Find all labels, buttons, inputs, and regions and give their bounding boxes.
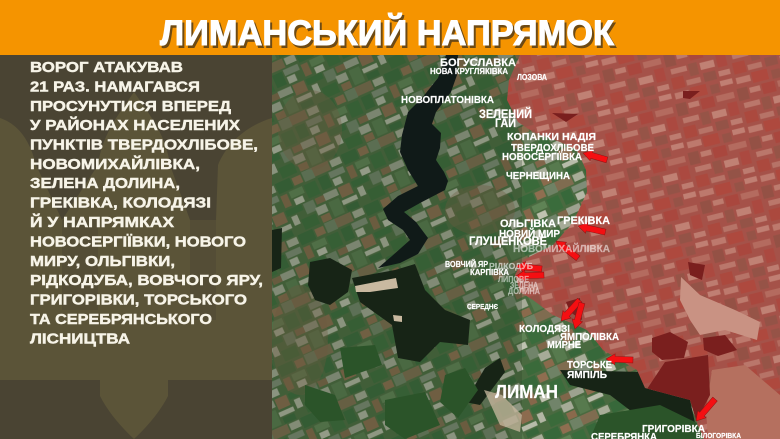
map: brown field clusters [272, 90, 515, 395]
arrow: Hrekivka [577, 221, 607, 237]
text block: attack summary: ЛІСНИЦТВА [30, 330, 130, 348]
settlement labels: ТВЕРДОХЛІБОВЕ [511, 143, 594, 154]
settlement labels: ГЛУЩЕНКОВЕ [469, 234, 547, 248]
title: ЛИМАНСЬКИЙ НАПРЯМОК [162, 16, 617, 56]
settlement labels: ЛОЗОВА [517, 73, 547, 82]
settlement labels: ЯМПОЛІВКА [560, 331, 619, 343]
settlement labels: КОПАНКИ НАДІЯ [507, 132, 596, 143]
text block: attack summary: НОВОСЕРГІЇВКИ, НОВОГО [30, 234, 246, 250]
arrow: Novomykhailivka [553, 237, 581, 263]
map: darker forests [272, 228, 695, 423]
arrow: Kolodiazi west [557, 297, 584, 325]
settlement labels: БОГУСЛАВКА [440, 57, 516, 69]
settlement labels: ГРИГОРІВКА [642, 423, 705, 435]
settlement labels: ОЛЬГІВКА [500, 218, 556, 230]
settlement labels: ЗЕЛЕНА [510, 280, 538, 290]
attack arrows [515, 148, 719, 425]
settlement labels: НОВОПЛАТОНІВКА [401, 94, 494, 106]
map: green woodland [305, 345, 700, 439]
settlement labels: ГАЙ [495, 117, 516, 130]
settlement labels: ДОЛИНА [508, 286, 540, 296]
title: ЛИМАНСЬКИЙ НАПРЯМОК [160, 13, 615, 53]
text block: attack summary: ТА СЕРЕБРЯНСЬКОГО [30, 311, 212, 328]
text block: attack summary: ВОРОГ АТАКУВАВ [30, 59, 183, 76]
text block: attack summary: РІДКОДУБА, ВОВЧОГО ЯРУ, [30, 272, 263, 289]
settlement labels: СЕРЕДНЄ [467, 304, 498, 311]
settlement labels: НОВА КРУГЛЯКІВКА [430, 67, 508, 76]
panel: left text background with trident emblem [0, 55, 272, 439]
settlement labels: ЗЕЛЕНИЙ [479, 108, 532, 121]
settlement labels: КОЛОДЯЗІ [519, 323, 570, 335]
text block: attack summary: 21 РАЗ. НАМАГАВСЯ [30, 78, 200, 96]
settlement labels: ЧЕРНЕЩИНА [506, 171, 570, 182]
arrow: Ridkodub south [516, 270, 544, 281]
map: red occupied area [500, 55, 780, 439]
satellite map [272, 55, 780, 439]
settlement labels: КАРПІВКА [470, 268, 509, 277]
map: tone overlay [272, 55, 522, 439]
map: pale south-east area [706, 365, 780, 439]
text block: attack summary: Й У НАПРЯМКАХ [30, 213, 174, 231]
text block: attack summary: У РАЙОНАХ НАСЕЛЕНИХ [30, 116, 240, 134]
settlement labels: ЛИПОВЕ [498, 274, 529, 284]
arrow: Kolodiazi east [570, 301, 587, 330]
settlement labels: ГРЕКІВКА [557, 215, 610, 227]
text block: attack summary: ГРЕКІВКА, КОЛОДЯЗІ [30, 194, 211, 212]
map: red tone overlay [500, 55, 780, 439]
text block: attack summary: ПУНКТІВ ТВЕРДОХЛІБОВЕ, [30, 136, 258, 154]
settlement labels: ЛИМАН [495, 382, 558, 402]
settlement labels: МИРНЕ [547, 339, 581, 351]
map: farmland base [272, 55, 780, 439]
map: sand patches [355, 278, 522, 432]
arrow: Hryhorivka [692, 396, 719, 425]
map: dark red woods [552, 91, 737, 422]
settlement labels: РІДКОДУБ [489, 262, 533, 271]
text block: attack summary: ПРОСУНУТИСЯ ВПЕРЕД [30, 98, 231, 115]
settlement labels: НОВИЙ МИР [499, 227, 560, 240]
settlement labels [401, 57, 742, 439]
header bar [0, 0, 780, 56]
map: pale sand in occupied area [680, 277, 760, 340]
text block: attack summary: НОВОМИХАЙЛІВКА, [30, 155, 200, 173]
arrow: Torske [606, 354, 633, 365]
text block: attack summary: МИРУ, ОЛЬГІВКИ, [30, 253, 175, 270]
text block: attack summary: ГРИГОРІВКИ, ТОРСЬКОГО [30, 292, 247, 308]
text block: attack summary: ЗЕЛЕНА ДОЛИНА, [30, 175, 180, 192]
arrow: Tverdokhlibove [581, 148, 609, 165]
text block: attack summary [30, 59, 263, 348]
map: reservoir and river [378, 55, 458, 268]
settlement labels: ВОВЧИЙ ЯР [445, 260, 489, 269]
settlement labels: ТОРСЬКЕ [567, 359, 612, 371]
settlement labels: НОВОСЕРГІЇВКА [502, 150, 582, 163]
settlement labels: ЯМПІЛЬ [567, 369, 607, 381]
settlement labels: НОВОМИХАЙЛІВКА [513, 242, 610, 255]
arrow: Ridkodub north [515, 261, 542, 274]
